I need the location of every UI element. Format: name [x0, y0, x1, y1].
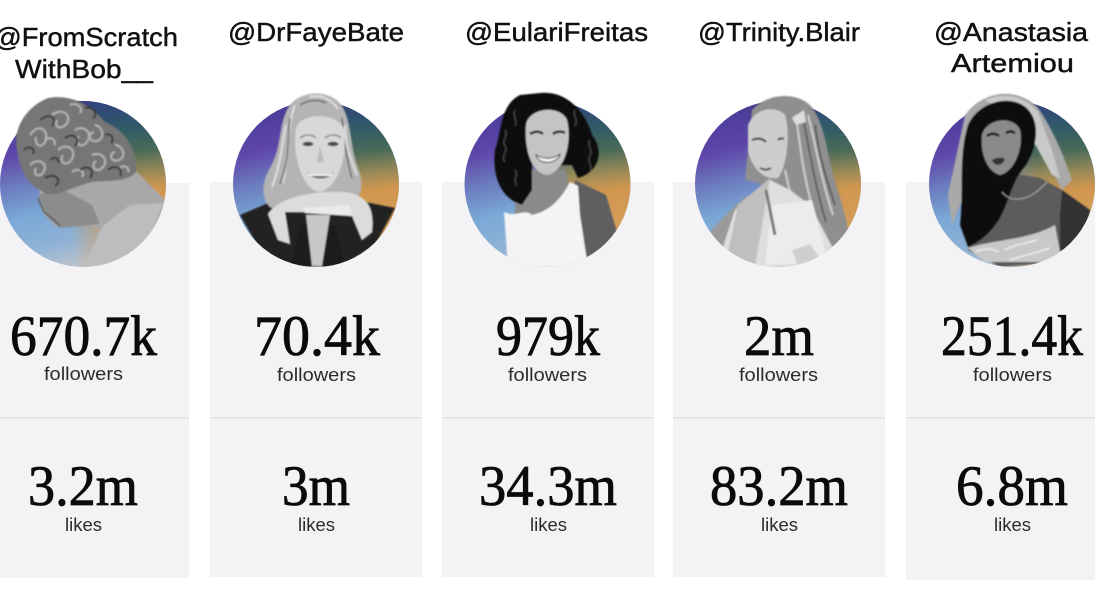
- stat: 83.2m likes: likes: [761, 515, 798, 535]
- stat: 979k followers: followers: [508, 365, 587, 385]
- heading: AnastasiaArtemiou handle: @Anastasia: [934, 17, 1089, 47]
- portrait: EulariFreitas: [464, 93, 630, 267]
- portrait: AnastasiaArtemiou: [929, 94, 1095, 267]
- heading: AnastasiaArtemiou handle: Artemiou: [951, 48, 1074, 78]
- stat: 83.2m likes: 83.2m: [710, 455, 848, 518]
- heading: FromScratchWithBob handle: [0, 22, 178, 84]
- stat: 2m followers: 2m: [744, 305, 814, 368]
- portrait: Trinity.Blair: [695, 96, 861, 267]
- heading: Trinity.Blair handle: @Trinity.Blair: [698, 17, 860, 47]
- stat: 251.4k followers: 251.4k: [941, 305, 1083, 368]
- panel: EulariFreitas stats card: [442, 182, 654, 577]
- panel: DrFayeBate stats card: [210, 182, 422, 577]
- stat: 34.3m likes: 34.3m: [479, 455, 617, 518]
- stat: 6.8m likes: likes: [994, 515, 1031, 535]
- stat: 6.8m likes: 6.8m: [956, 455, 1068, 518]
- stat: 3.2m likes: likes: [65, 515, 102, 535]
- panel: AnastasiaArtemiou stats card: [906, 182, 1095, 580]
- stat: 670.7k followers: followers: [44, 364, 123, 384]
- stat: 251.4k followers: followers: [973, 365, 1052, 385]
- heading: EulariFreitas handle: @EulariFreitas: [465, 17, 648, 47]
- heading: DrFayeBate handle: @DrFayeBate: [228, 17, 404, 47]
- heading: AnastasiaArtemiou handle: [934, 17, 1089, 78]
- panel: FromScratchWithBob stats card: [0, 183, 189, 578]
- stat: 3.2m likes: 3.2m: [28, 455, 138, 518]
- portrait: DrFayeBate: [233, 93, 399, 267]
- stat: 979k followers: 979k: [496, 305, 600, 368]
- stat: 2m followers: followers: [739, 365, 818, 385]
- stat: 34.3m likes: likes: [530, 515, 567, 535]
- panel: Trinity.Blair stats card: [673, 182, 885, 577]
- portrait: FromScratchWithBob statue: [0, 97, 166, 268]
- stat: 70.4k followers: followers: [277, 365, 356, 385]
- stat: 3m likes: 3m: [282, 455, 350, 518]
- stat: 670.7k followers: 670.7k: [10, 305, 157, 368]
- stat: 70.4k followers: 70.4k: [254, 305, 380, 368]
- heading: FromScratchWithBob handle: WithBob__: [15, 54, 154, 84]
- stat: 3m likes: likes: [298, 515, 335, 535]
